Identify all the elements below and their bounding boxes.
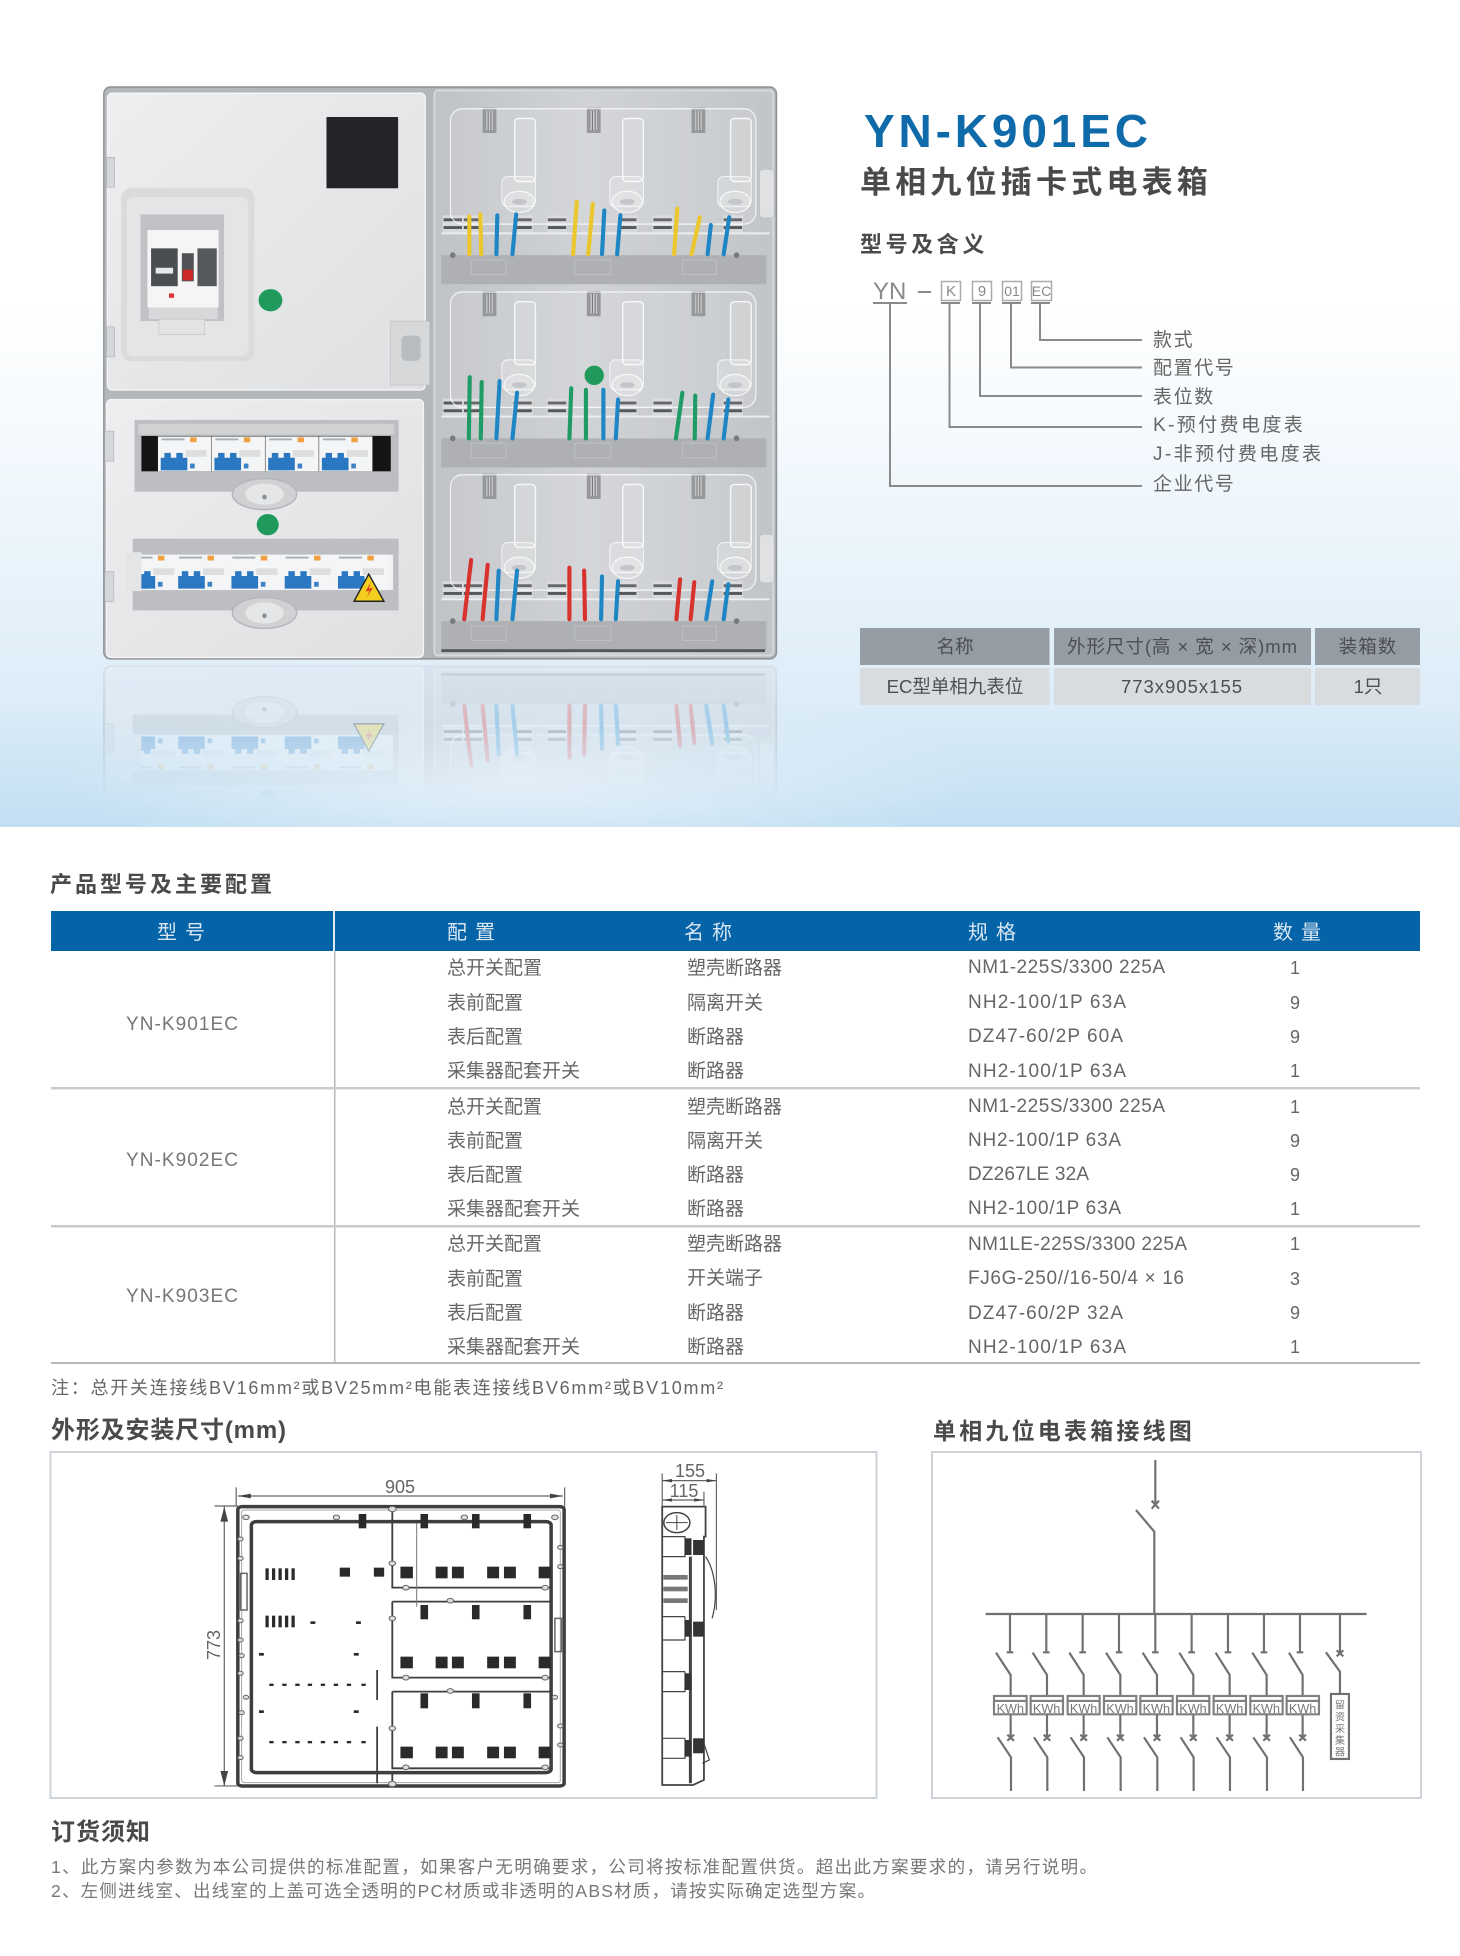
group YN-K902EC: 1 (1290, 1097, 1300, 1117)
group YN-K902EC: YN-K902EC (126, 1150, 238, 1171)
group YN-K903EC: 断路器 (687, 1302, 744, 1324)
meaning labels: 企业代号 (1153, 473, 1235, 495)
heading: model meaning: 型号及含义 (860, 232, 988, 257)
dimension labels: 773 (204, 1630, 224, 1660)
group YN-K902EC: 总开关配置 (447, 1096, 542, 1118)
kWh meters (994, 1696, 1319, 1716)
meaning labels (1153, 329, 1323, 495)
group YN-K903EC: 断路器 (687, 1336, 744, 1358)
table header: 配置 (447, 922, 503, 944)
kWh meters: KWh (1106, 1702, 1134, 1716)
size summary table (860, 628, 1420, 705)
code segments: K (946, 283, 956, 300)
group YN-K901EC: 断路器 (687, 1060, 744, 1082)
size summary table: 装箱数 (1339, 636, 1397, 657)
group YN-K901EC: NM1-225S/3300 225A (968, 957, 1165, 978)
group YN-K901EC: 表前配置 (447, 992, 523, 1014)
group YN-K901EC: 9 (1290, 993, 1300, 1013)
subtitle: product name: 单相九位插卡式电表箱 (860, 165, 1212, 200)
group YN-K903EC: NH2-100/1P 63A (968, 1337, 1126, 1358)
table footnote: 注：总开关连接线BV16mm²或BV25mm²电能表连接线BV6mm²或BV10mm² (51, 1378, 723, 1398)
code segments: YN (873, 278, 906, 305)
collector box: 资 (1335, 1712, 1345, 1724)
dimension labels: 155 (675, 1461, 705, 1481)
meaning labels: 配置代号 (1153, 357, 1235, 379)
size summary table: 外形尺寸(高 × 宽 × 深)mm (1067, 636, 1297, 657)
panel: dimensions drawing (50, 1452, 876, 1798)
group YN-K903EC: 开关端子 (687, 1267, 763, 1289)
group YN-K903EC: 9 (1290, 1303, 1300, 1323)
product photo reflection (103, 666, 778, 792)
group YN-K902EC: 表后配置 (447, 1164, 523, 1186)
group YN-K901EC: 1 (1290, 1061, 1300, 1081)
table header: 型号 (157, 921, 213, 944)
group YN-K902EC: 断路器 (687, 1198, 744, 1220)
heading: product models and configuration: 产品型号及主要配置 (50, 872, 275, 897)
group YN-K902EC: 隔离开关 (687, 1130, 763, 1152)
ordering notes text (51, 1857, 1097, 1901)
heading: dimensions: 外形及安装尺寸(mm) (51, 1417, 286, 1444)
kWh meters: KWh (1216, 1702, 1243, 1716)
group YN-K903EC: 表后配置 (447, 1302, 523, 1324)
code segments: EC (1032, 283, 1051, 299)
leader lines (873, 303, 1142, 486)
dimension labels (204, 1461, 705, 1660)
title: model number: YN-K901EC (864, 105, 1148, 157)
group YN-K901EC: 表后配置 (447, 1026, 523, 1048)
group YN-K902EC: 9 (1290, 1131, 1300, 1151)
table header: 数量 (1273, 921, 1329, 944)
table header (51, 911, 1420, 951)
branch circuits (996, 1614, 1343, 1791)
size summary table: EC型单相九表位 (887, 676, 1023, 697)
group YN-K902EC: 采集器配套开关 (447, 1198, 580, 1220)
table header: 规格 (968, 921, 1024, 944)
kWh meters: KWh (1033, 1702, 1060, 1716)
group YN-K902EC: 1 (1290, 1199, 1300, 1219)
group YN-K903EC: 1 (1290, 1234, 1300, 1254)
kWh meters: KWh (1289, 1702, 1316, 1716)
group YN-K903EC: 表前配置 (447, 1268, 523, 1290)
kWh meters: KWh (1143, 1702, 1170, 1716)
code segments: 01 (1004, 283, 1020, 299)
kWh meters: KWh (1070, 1702, 1097, 1716)
code segments: 9 (978, 283, 986, 300)
dimension labels: 905 (385, 1477, 415, 1497)
dimension labels: 115 (670, 1481, 698, 1501)
meaning labels: J-非预付费电度表 (1153, 443, 1323, 465)
configuration table (51, 911, 1420, 1364)
group YN-K901EC: 9 (1290, 1027, 1300, 1047)
product photo: open nine-position meter box (104, 87, 777, 659)
group YN-K901EC: 采集器配套开关 (447, 1060, 580, 1082)
collector box: 器 (1335, 1747, 1345, 1759)
model code breakdown diagram (873, 278, 1323, 495)
group YN-K902EC: 表前配置 (447, 1130, 523, 1152)
group YN-K902EC: NH2-100/1P 63A (968, 1130, 1121, 1151)
size summary table: 1只 (1354, 676, 1382, 697)
size summary table: 名称 (936, 636, 974, 657)
heading: wiring diagram: 单相九位电表箱接线图 (933, 1418, 1195, 1444)
table header: 名称 (684, 921, 740, 944)
group YN-K901EC: 总开关配置 (447, 957, 542, 979)
size summary table: 773x905x155 (1121, 676, 1243, 697)
kWh meters: KWh (997, 1702, 1024, 1716)
group YN-K903EC: YN-K903EC (126, 1286, 238, 1307)
group YN-K901EC: 断路器 (687, 1026, 744, 1048)
group YN-K901EC: DZ47-60/2P 60A (968, 1026, 1123, 1047)
group YN-K903EC: FJ6G-250//16-50/4 × 16 (968, 1268, 1184, 1289)
group YN-K901EC (126, 957, 1300, 1082)
table rules (51, 951, 1420, 1364)
group YN-K901EC: NH2-100/1P 63A (968, 1061, 1126, 1082)
kWh meters: KWh (1253, 1702, 1280, 1716)
group YN-K903EC: 1 (1290, 1337, 1300, 1357)
main switch and bus (986, 1460, 1367, 1614)
group YN-K901EC: YN-K901EC (126, 1014, 238, 1035)
front view drawing (215, 1487, 565, 1787)
side view drawing (662, 1473, 716, 1785)
group YN-K903EC: 总开关配置 (447, 1233, 542, 1255)
ordering notes text: 2、左侧进线室、出线室的上盖可选全透明的PC材质或非透明的ABS材质，请按实际确定选型方案。 (51, 1881, 875, 1901)
group YN-K903EC (126, 1233, 1300, 1358)
heading: ordering notes: 订货须知 (51, 1819, 151, 1846)
group YN-K902EC: 断路器 (687, 1164, 744, 1186)
collector box: 留 (1335, 1698, 1345, 1711)
group YN-K902EC (126, 1096, 1300, 1220)
group YN-K903EC: NM1LE-225S/3300 225A (968, 1234, 1187, 1255)
meaning labels: 款式 (1153, 329, 1194, 351)
group YN-K901EC: NH2-100/1P 63A (968, 992, 1126, 1013)
code segments (873, 278, 1052, 305)
panel: wiring diagram (932, 1452, 1421, 1798)
group YN-K902EC: DZ267LE 32A (968, 1164, 1089, 1185)
group YN-K903EC: 采集器配套开关 (447, 1336, 580, 1358)
group YN-K903EC: DZ47-60/2P 32A (968, 1303, 1123, 1324)
collector box: 集 (1335, 1734, 1345, 1747)
group YN-K902EC: 9 (1290, 1165, 1300, 1185)
group YN-K902EC: NH2-100/1P 63A (968, 1198, 1121, 1219)
ordering notes text: 1、此方案内参数为本公司提供的标准配置，如果客户无明确要求，公司将按标准配置供货。超出此方案要求的，请另行说明。 (51, 1857, 1097, 1877)
kWh meters: KWh (1179, 1702, 1207, 1716)
group YN-K903EC: 塑壳断路器 (687, 1233, 782, 1255)
meaning labels: 表位数 (1153, 386, 1215, 408)
group YN-K901EC: 隔离开关 (687, 992, 763, 1014)
collector box (1331, 1694, 1349, 1759)
group YN-K903EC: 3 (1290, 1269, 1300, 1289)
group YN-K902EC: 塑壳断路器 (687, 1096, 782, 1118)
group YN-K902EC: NM1-225S/3300 225A (968, 1096, 1165, 1117)
collector box: 采 (1335, 1724, 1345, 1736)
meaning labels: K-预付费电度表 (1153, 414, 1305, 436)
group YN-K901EC: 1 (1290, 958, 1300, 978)
group YN-K901EC: 塑壳断路器 (687, 957, 782, 979)
